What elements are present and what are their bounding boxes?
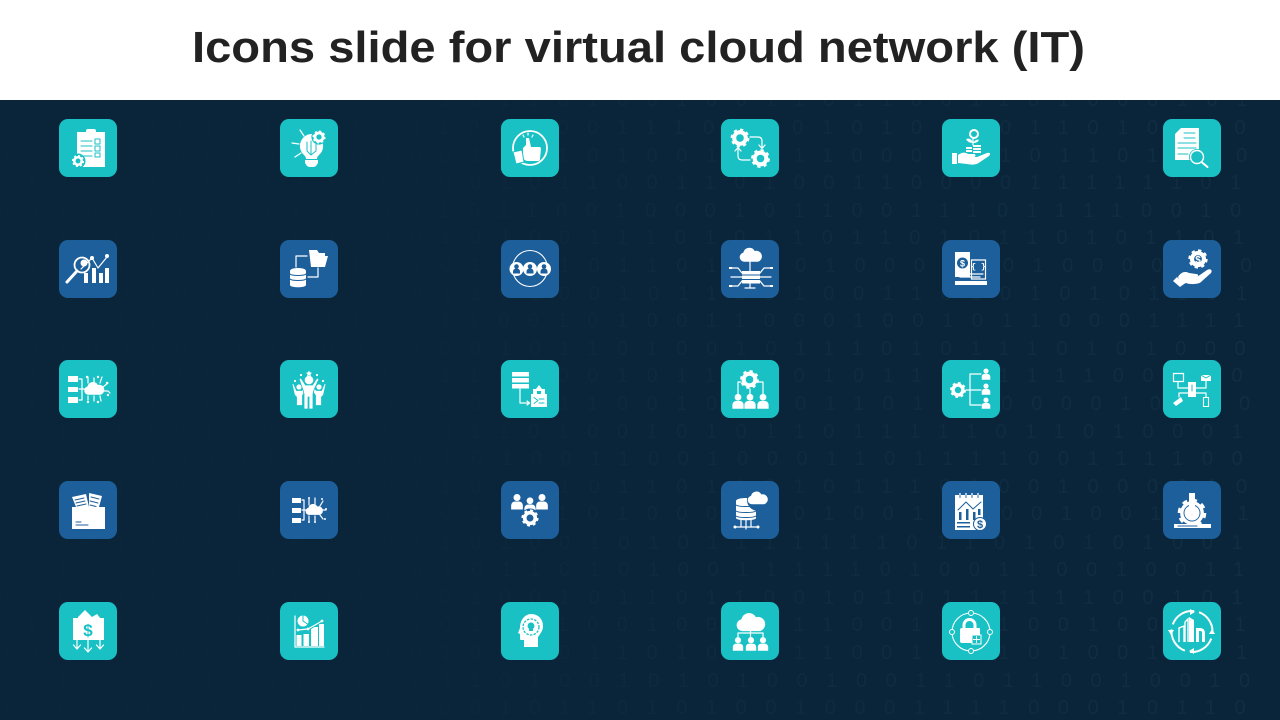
binary digit background pattern: 1010010101101001010011001000110111100111100	[0, 448, 1261, 470]
binary digit background pattern: 1100101011010010110100100011100101100100011	[0, 614, 1264, 636]
icon: two gears with cycle arrows	[732, 130, 769, 167]
icon: thumbs up in a circle	[513, 131, 547, 165]
icon: magnifier over bar chart	[67, 254, 109, 283]
icon: server rack linked to locked terminal	[512, 372, 547, 407]
tile: small cloud organization	[280, 481, 338, 539]
tile: thumbs up	[501, 119, 559, 177]
icon: tower linked to monitor, mail, megaphone and phone	[1173, 374, 1211, 406]
tile: cloud server network	[721, 240, 779, 298]
tile: wallet expenses	[59, 602, 117, 660]
binary digit background pattern: 0011010010110101001011010011100101101001001	[0, 642, 1266, 664]
binary digit background pattern: 1001011010110100101101000110100101001001011	[0, 503, 1267, 525]
icon: dollar card and code laptop: $	[960, 258, 965, 268]
tile: device network	[1163, 360, 1221, 418]
icon: head profile with gear and bulb	[518, 614, 543, 647]
tile: payment code laptop	[942, 240, 1000, 298]
icon: cloud connected to three people	[733, 613, 768, 651]
binary digit background pattern: 1001010110100101101001011101001101010101101	[0, 283, 1266, 305]
tile: investment growth	[942, 119, 1000, 177]
tile: security lock	[942, 602, 1000, 660]
tile: team settings	[501, 481, 559, 539]
icon: gear branching to three people	[951, 368, 990, 409]
tile: team raising hands	[280, 360, 338, 418]
binary digit background pattern: 1101001011001010010110011010011000011111101	[0, 172, 1260, 194]
binary digit background pattern: 0101001011010110010110101001000111100010110	[0, 697, 1264, 719]
binary digit background pattern: 1011000101001101010011101011011010110101101	[0, 227, 1263, 249]
binary digit background pattern: 0110100101101001011010010011011001101000101	[0, 89, 1266, 111]
tile: gear hierarchy	[721, 360, 779, 418]
tile: cloud hierarchy	[721, 602, 779, 660]
binary digit background pattern: 0110101001011001100101001100010010110001111	[0, 310, 1263, 332]
icon: hand holding dollar gear: $	[1195, 255, 1201, 266]
binary digit background pattern: 1010010110100110010110100101110101110101000	[0, 338, 1264, 360]
tile: idea bulb	[280, 119, 338, 177]
icon: notepad with chart and dollar coin: $	[977, 519, 983, 531]
icon: cloud over server with circuit lines	[729, 248, 773, 288]
binary digit background pattern: 1010011101001011001001110100101001011010110	[0, 117, 1264, 139]
tile: database to folder	[280, 240, 338, 298]
icon: document with magnifier	[1175, 128, 1208, 167]
binary digit background pattern: 0010111001101001011001000101100111011110010	[0, 200, 1260, 222]
binary digit background pattern: 0101101010011010100101101010100000010000100	[0, 255, 1270, 277]
tile: gear people tree	[942, 360, 1000, 418]
icon: folder with papers	[72, 493, 105, 529]
tile: download gear	[1163, 481, 1221, 539]
icon: checklist clipboard with gear	[70, 129, 105, 168]
binary digit background pattern: 1100101001011010010110010010110101000010100	[0, 393, 1269, 415]
binary digit background pattern: 0011010110010100110100101011011111011010001	[0, 421, 1261, 443]
icon: data boxes feeding cloud nodes	[68, 376, 110, 403]
icon: gear with download arrow	[1174, 493, 1211, 528]
binary digit background pattern: 0101101001010110100101101100101011111100101	[0, 587, 1261, 609]
icon: light bulb with gear	[292, 129, 327, 167]
icon: database linked to folder	[290, 250, 328, 287]
icon: three people in a ring	[510, 250, 551, 286]
tile: server to secure terminal	[501, 360, 559, 418]
tile: checklist clipboard	[59, 119, 117, 177]
binary digit background pattern: 0101101001100101101001011010101110111100100	[0, 365, 1261, 387]
tile: cycle buildings	[1163, 602, 1221, 660]
tile: financial hand gear	[1163, 240, 1221, 298]
binary digit background pattern: 0110100101001011010010101111111011010101001	[0, 532, 1261, 554]
binary digit background pattern: 1010010110101001011010100111110100110010011	[0, 559, 1263, 581]
icon: data boxes feeding small cloud	[292, 497, 327, 523]
tile: cloud database	[721, 481, 779, 539]
tile: analytics	[59, 240, 117, 298]
tile: financial report	[942, 481, 1000, 539]
tile: document folder	[59, 481, 117, 539]
icon: dollar card and code laptop	[955, 252, 987, 285]
tile: team circle	[501, 240, 559, 298]
binary digit background pattern: 1010110100101001101001010100100110110010010	[0, 670, 1269, 692]
icon: padlock in node ring	[950, 610, 992, 654]
icon: three people with raised arms and stars	[292, 370, 326, 409]
title: Icons slide for virtual cloud network (IT)	[192, 23, 1085, 72]
icon: dollar card and code laptop: { }	[971, 263, 986, 272]
tile: cloud organization	[59, 360, 117, 418]
tile: document search	[1163, 119, 1221, 177]
tile: head with idea gear	[501, 602, 559, 660]
binary digit background pattern: 0100110010110100110101001011100010101101010	[0, 145, 1266, 167]
icon: three people with gear	[511, 494, 548, 528]
icon: hand holding coins and plant	[952, 130, 990, 165]
title band	[0, 0, 1280, 100]
tile: chart report	[280, 602, 338, 660]
icon: buildings inside circular arrows	[1166, 605, 1218, 658]
icon: bar chart with pie and trend line	[295, 616, 324, 647]
icon: database with cloud and connectors	[734, 489, 769, 529]
tile: gear process	[721, 119, 779, 177]
icon: gear connected to three people	[732, 371, 769, 409]
binary digit background pattern: 0101100101001011010101101101011101001000010	[0, 476, 1266, 498]
icon: wallet with dollar and down arrows: $	[83, 621, 93, 640]
